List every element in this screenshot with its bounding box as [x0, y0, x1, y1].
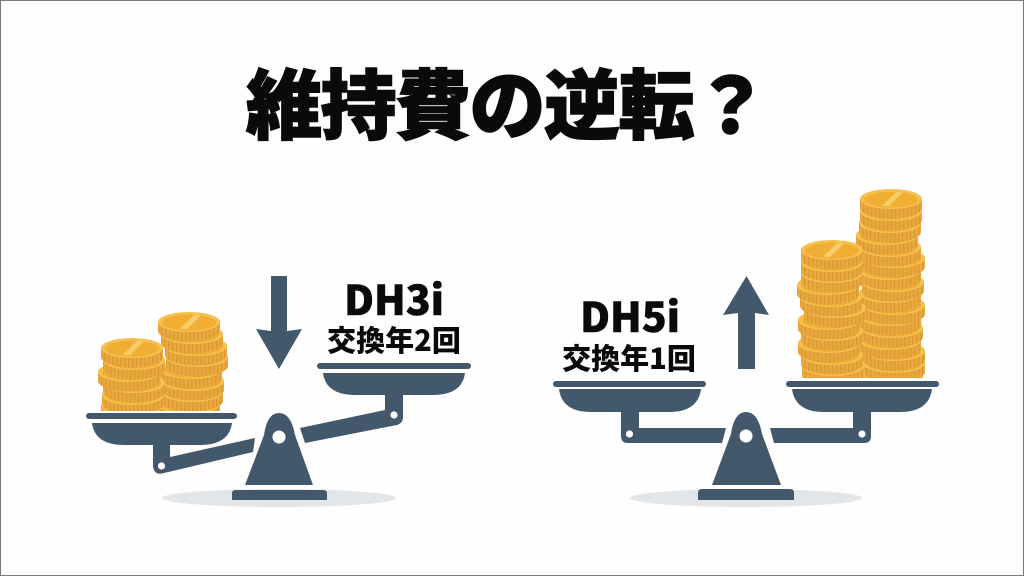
label 交換年2回: 交換年2回 — [327, 318, 461, 360]
level beam — [621, 405, 871, 443]
left pan — [86, 413, 237, 445]
right pan — [786, 381, 939, 412]
right pan — [317, 363, 471, 395]
coin stacks — [98, 312, 228, 411]
base — [232, 490, 327, 500]
panel: DH5i scale — [553, 189, 939, 507]
label 交換年1回: 交換年1回 — [562, 336, 696, 378]
ground shadow — [630, 489, 862, 507]
title: 維持費の逆転？ — [246, 45, 768, 155]
label DH3i: DH3i — [344, 267, 444, 327]
base — [698, 489, 794, 500]
ground shadow — [162, 489, 396, 507]
arrow up — [723, 276, 769, 369]
arrow down — [256, 276, 302, 369]
panel: DH3i scale — [86, 267, 471, 507]
fulcrum — [245, 413, 313, 485]
label DH5i: DH5i — [580, 284, 680, 344]
tilted beam — [153, 395, 403, 474]
fulcrum — [712, 412, 781, 485]
coin stacks — [797, 189, 925, 398]
left pan — [553, 381, 706, 412]
